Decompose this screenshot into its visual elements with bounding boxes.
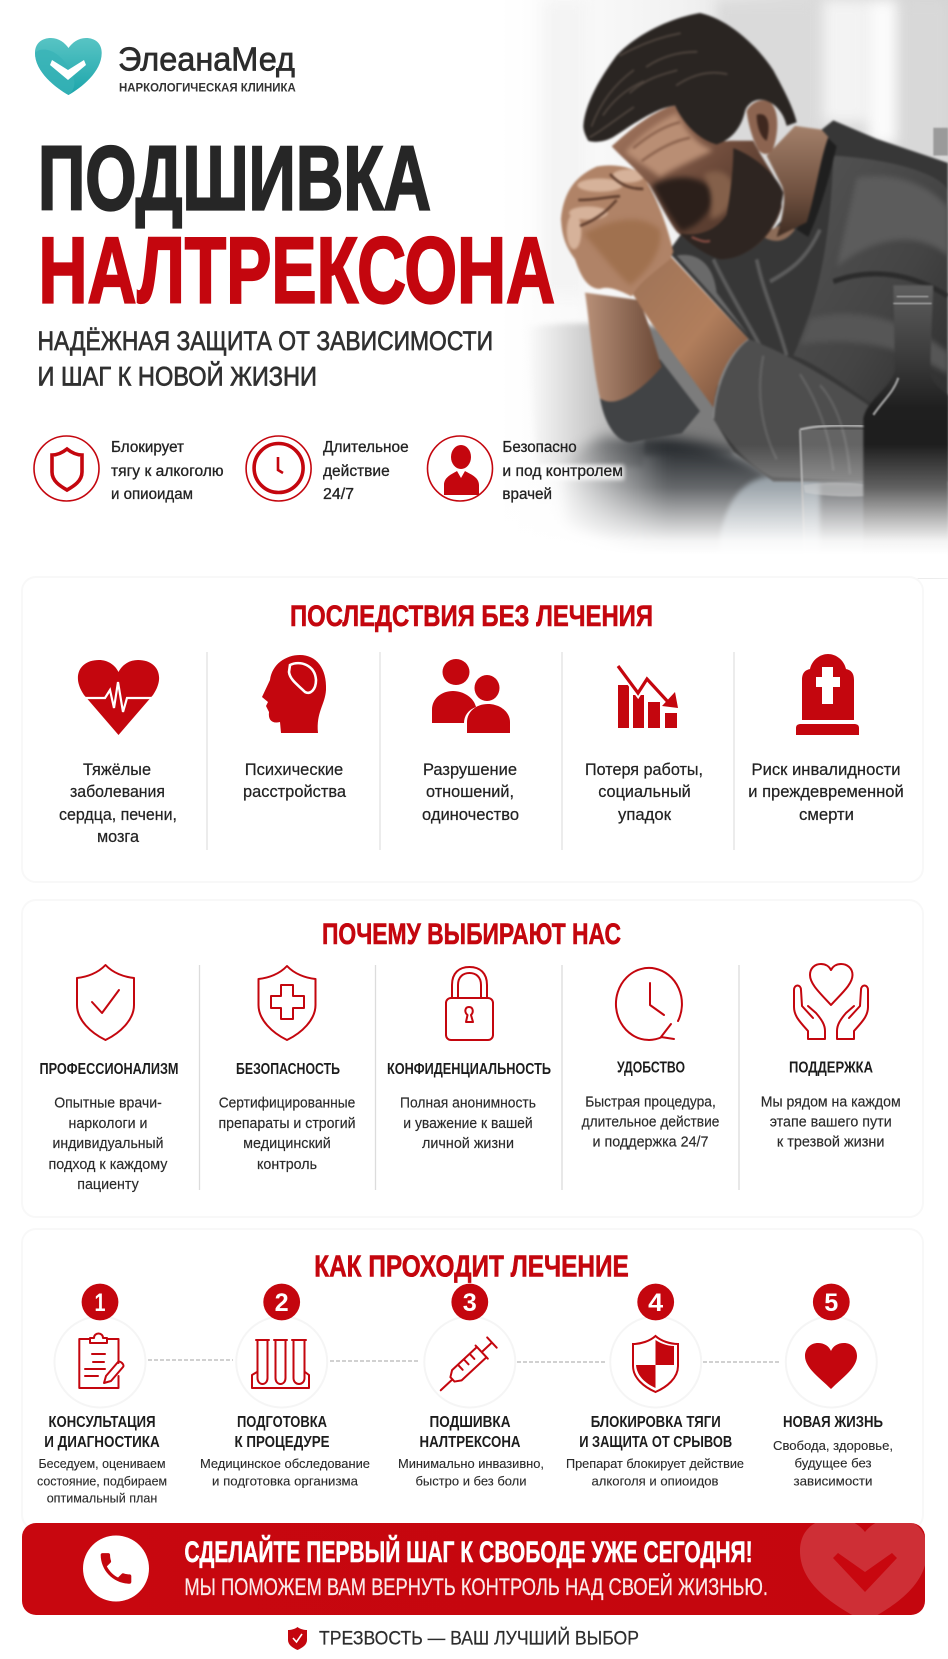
benefit: blocks craving (34, 436, 224, 503)
item: professionalism: ПРОФЕССИОНАЛИЗМ (40, 1061, 178, 1078)
benefit: safe under supervision: Безопасно (502, 439, 577, 456)
item: safety: медицинский (243, 1136, 331, 1152)
item: confidentiality (387, 967, 551, 1152)
item: convenience: и поддержка 24/7 (592, 1134, 708, 1150)
step 1: consultation: КОНСУЛЬТАЦИЯ (48, 1414, 156, 1431)
item: support (761, 964, 901, 1150)
step 1: consultation: состояние, подбираем (37, 1474, 167, 1489)
title (38, 128, 555, 322)
step 2: preparation: 2 (275, 1289, 289, 1317)
step 2: preparation: и подготовка организма (212, 1474, 359, 1489)
item: broken relationships: одиночество (422, 806, 519, 824)
item: professionalism: наркологи и (68, 1116, 148, 1132)
logo subtitle: НАРКОЛОГИЧЕСКАЯ КЛИНИКА (119, 80, 296, 94)
item: broken relationships (422, 659, 519, 824)
item: confidentiality: личной жизни (422, 1136, 514, 1152)
item: heart disease: мозга (97, 828, 140, 846)
item: safety: препараты и строгий (218, 1116, 356, 1132)
photo: man in despair with bottle and glass (534, 0, 948, 579)
step 4: craving block: алкоголя и опиоидов (592, 1474, 719, 1489)
subtitle (38, 326, 493, 392)
item: safety: БЕЗОПАСНОСТЬ (236, 1061, 340, 1078)
step 4: craving block: И ЗАЩИТА ОТ СРЫВОВ (579, 1434, 732, 1451)
step 1: consultation (37, 1284, 167, 1506)
item: confidentiality: Полная анонимность (400, 1096, 536, 1112)
step 5: new life: 5 (824, 1289, 838, 1317)
benefit: blocks craving: тягу к алкоголю (111, 463, 224, 480)
item: convenience: УДОБСТВО (617, 1060, 685, 1076)
step 4: craving block (566, 1284, 744, 1489)
item: convenience: Быстрая процедура, (585, 1094, 716, 1110)
benefit: long action: действие (323, 463, 390, 480)
step 3: implant: 3 (463, 1289, 477, 1317)
step 2: preparation: К ПРОЦЕДУРЕ (234, 1434, 330, 1451)
step 3: implant: НАЛТРЕКСОНА (420, 1434, 520, 1451)
benefit: safe under supervision (428, 436, 624, 503)
step 1: consultation: И ДИАГНОСТИКА (44, 1434, 160, 1451)
panel: why choose us (22, 900, 923, 1217)
benefit: safe under supervision: и под контролем (502, 463, 623, 480)
item: job loss: упадок (618, 806, 672, 824)
item: job loss (585, 666, 703, 824)
item: professionalism: подход к каждому (48, 1157, 168, 1173)
step 5: new life: НОВАЯ ЖИЗНЬ (783, 1414, 883, 1431)
call to action banner (22, 1523, 925, 1615)
item: convenience: длительное действие (582, 1114, 719, 1130)
step 1: consultation: оптимальный план (47, 1491, 157, 1506)
step 5: new life (773, 1284, 893, 1489)
item: heart disease: сердца, печени, (59, 806, 177, 824)
icon: phone (83, 1536, 149, 1602)
item: mental disorders (243, 655, 347, 801)
item: professionalism: индивидуальный (52, 1136, 164, 1152)
step 4: craving block: 4 (648, 1289, 663, 1317)
step 3: implant (398, 1284, 544, 1489)
item: support: Мы рядом на каждом (761, 1094, 901, 1110)
heading: consequences: ПОСЛЕДСТВИЯ БЕЗ ЛЕЧЕНИЯ (290, 600, 653, 633)
item: confidentiality: КОНФИДЕНЦИАЛЬНОСТЬ (387, 1061, 551, 1078)
item: support: к трезвой жизни (777, 1134, 884, 1150)
item: heart disease (59, 660, 177, 846)
item: heart disease: заболевания (70, 783, 165, 801)
step 5: new life: Свобода, здоровье, (773, 1438, 893, 1453)
step 3: implant: быстро и без боли (416, 1474, 526, 1489)
step 5: new life: зависимости (794, 1474, 872, 1489)
panel: consequences without treatment (22, 577, 923, 882)
item: convenience (582, 968, 719, 1150)
item: job loss: Потеря работы, (585, 761, 703, 779)
step 4: craving block: БЛОКИРОВКА ТЯГИ (591, 1414, 721, 1431)
subtitle: НАДЁЖНАЯ ЗАЩИТА ОТ ЗАВИСИМОСТИ (38, 326, 493, 356)
item: professionalism (40, 965, 178, 1193)
item: safety: Сертифицированные (219, 1096, 355, 1112)
step 2: preparation (200, 1284, 370, 1489)
logo name: ЭлеанаМед (118, 40, 295, 78)
step 5: new life: будущее без (794, 1456, 872, 1471)
item: broken relationships: отношений, (426, 783, 514, 801)
heading: why choose us: ПОЧЕМУ ВЫБИРАЮТ НАС (322, 918, 621, 951)
step 2: preparation: ПОДГОТОВКА (237, 1414, 327, 1431)
item: job loss: социальный (598, 783, 691, 801)
heading: how treatment goes: КАК ПРОХОДИТ ЛЕЧЕНИЕ (314, 1248, 629, 1284)
item: support: этапе вашего пути (770, 1114, 892, 1130)
item: disability and death: Риск инвалидности (752, 761, 900, 779)
step 3: implant: Минимально инвазивно, (398, 1456, 544, 1471)
benefit: long action: Длительное (323, 439, 409, 456)
item: disability and death: смерти (799, 806, 854, 824)
item: broken relationships: Разрушение (423, 761, 517, 779)
step 1: consultation: Беседуем, оцениваем (38, 1456, 166, 1471)
step 1: consultation: 1 (94, 1289, 106, 1317)
step 2: preparation: Медицинское обследование (200, 1456, 370, 1471)
panel: how treatment goes (22, 1229, 923, 1529)
item: safety: контроль (257, 1157, 317, 1173)
benefit: long action: 24/7 (323, 486, 354, 503)
benefit: blocks craving: и опиоидам (111, 486, 193, 503)
item: safety (218, 966, 356, 1173)
subtitle: И ШАГ К НОВОЙ ЖИЗНИ (38, 360, 317, 392)
item: support: ПОДДЕРЖКА (789, 1060, 873, 1076)
step 4: craving block: Препарат блокирует действие (566, 1456, 744, 1471)
footer slogan: ТРЕЗВОСТЬ — ВАШ ЛУЧШИЙ ВЫБОР (319, 1628, 639, 1650)
benefits row (34, 436, 624, 503)
title line 2: НАЛТРЕКСОНА (38, 218, 555, 322)
item: professionalism: пациенту (77, 1177, 139, 1193)
item: disability and death (748, 654, 904, 824)
benefit: safe under supervision: врачей (502, 486, 552, 503)
banner subline: МЫ ПОМОЖЕМ ВАМ ВЕРНУТЬ КОНТРОЛЬ НАД СВОЕЙ ЖИЗНЬЮ. (184, 1573, 768, 1601)
benefit: blocks craving: Блокирует (111, 439, 184, 456)
item: heart disease: Тяжёлые (83, 761, 151, 779)
icon: logo heart (35, 38, 102, 95)
item: confidentiality: и уважение к вашей (403, 1116, 533, 1132)
step 3: implant: ПОДШИВКА (430, 1414, 510, 1431)
item: professionalism: Опытные врачи- (54, 1096, 162, 1112)
icon: banner heart watermark (800, 1523, 925, 1615)
benefit: long action (246, 436, 409, 503)
item: mental disorders: расстройства (243, 783, 347, 801)
item: mental disorders: Психические (245, 761, 343, 779)
logo (35, 38, 296, 95)
item: disability and death: и преждевременной (748, 783, 904, 801)
title line 1: ПОДШИВКА (38, 128, 431, 230)
